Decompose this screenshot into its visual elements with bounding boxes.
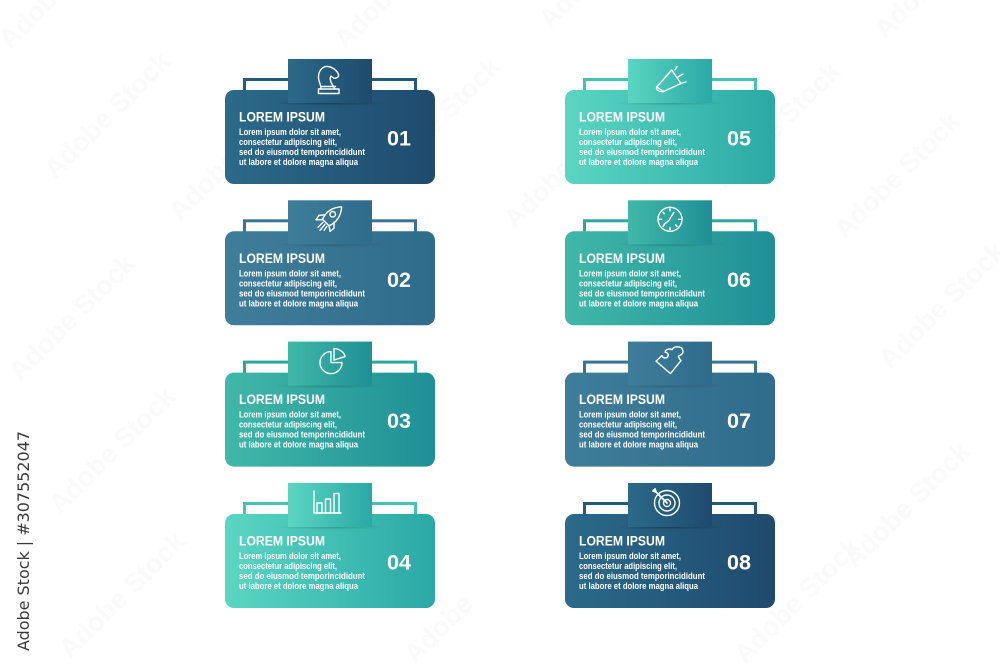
body text: consectetur adipiscing elit, [239,137,337,147]
card 05 [565,59,775,184]
card body [225,90,435,184]
card body [565,514,775,608]
card 08 [565,483,775,608]
watermark pattern: Adobe Stock [368,51,507,189]
frame [584,221,756,241]
body text: sed do eiusmod temporincididunt [239,430,365,440]
tab shadow [274,524,386,530]
heading: LOREM IPSUM [239,534,325,548]
card 07 [565,342,775,467]
body text: consectetur adipiscing elit, [239,278,337,288]
card 02 [225,200,435,325]
body text: Lorem ipsum dolor sit amet, [239,551,341,561]
body text: Lorem ipsum dolor sit amet, [579,127,681,137]
watermark pattern: Adobe [163,146,244,226]
frame [244,362,416,382]
body text: ut labore et dolore magna aliqua [579,298,699,308]
tab [628,342,712,386]
body text: Lorem ipsum dolor sit amet, [239,127,341,137]
heading: LOREM IPSUM [579,534,665,548]
watermark pattern: Adobe [498,154,579,234]
body text: sed do eiusmod temporincididunt [239,288,365,298]
body text: Lorem ipsum dolor sit amet, [239,410,341,420]
body text: consectetur adipiscing elit, [239,420,337,430]
icon: target with arrow [653,489,680,516]
number: 05 [727,128,751,150]
tab shadow [614,241,726,247]
card body [565,231,775,325]
body text: Lorem ipsum dolor sit amet, [579,410,681,420]
card 01 [225,59,435,184]
frame [244,80,416,100]
tab shadow [274,383,386,389]
icon: puzzle piece [656,347,683,374]
body text: ut labore et dolore magna aliqua [239,581,359,591]
tab shadow [614,524,726,530]
watermark pattern: Adobe Stock [828,106,967,244]
tab shadow [614,100,726,106]
watermark pattern: Adobe [398,589,479,667]
body text: Lorem ipsum dolor sit amet, [579,551,681,561]
watermark pattern: Adobe Stock [838,436,977,574]
icon: bar chart [314,491,341,513]
tab [288,200,372,244]
body text: sed do eiusmod temporincididunt [579,288,705,298]
tab shadow [274,100,386,106]
body text: ut labore et dolore magna aliqua [239,440,359,450]
body text: ut labore et dolore magna aliqua [239,157,359,167]
icon: chess knight [318,66,339,94]
tab [628,200,712,244]
icon: megaphone [657,66,686,92]
heading: LOREM IPSUM [579,392,665,407]
frame [244,504,416,524]
body text: sed do eiusmod temporincididunt [239,147,365,157]
card 03 [225,342,435,467]
number: 08 [727,552,751,574]
heading: LOREM IPSUM [239,392,325,407]
watermark pattern: Adobe Stock [53,526,192,664]
tab [288,483,372,527]
body text: ut labore et dolore magna aliqua [579,157,699,167]
watermark pattern: Adobe Stock [43,381,182,519]
card body [225,231,435,325]
watermark pattern: Adobe Stock [728,531,867,667]
heading: LOREM IPSUM [239,251,325,266]
icon: clock [658,207,682,231]
card body [225,514,435,608]
body text: ut labore et dolore magna aliqua [239,298,359,308]
number: 01 [387,128,411,150]
body text: ut labore et dolore magna aliqua [579,581,699,591]
watermark pattern: Adobe Stock [38,46,177,184]
body text: sed do eiusmod temporincididunt [579,430,705,440]
card 06 [565,200,775,325]
tab [288,59,372,103]
card body [565,90,775,184]
number: 04 [387,552,411,574]
number: 06 [727,269,751,292]
body text: sed do eiusmod temporincididunt [579,571,705,581]
heading: LOREM IPSUM [239,110,325,124]
body text: ut labore et dolore magna aliqua [579,440,699,450]
body text: consectetur adipiscing elit, [239,561,337,571]
frame [244,221,416,241]
frame [584,504,756,524]
watermark pattern: Adobe Stock [708,56,847,194]
heading: LOREM IPSUM [579,110,665,124]
number: 03 [387,410,411,433]
tab [628,483,712,527]
icon: pie chart [320,349,345,374]
heading: LOREM IPSUM [579,251,665,266]
body text: sed do eiusmod temporincididunt [579,147,705,157]
card body [225,373,435,467]
body text: consectetur adipiscing elit, [579,420,677,430]
tab shadow [274,241,386,247]
card 04 [225,483,435,608]
body text: Lorem ipsum dolor sit amet, [239,268,341,278]
number: 07 [727,410,751,433]
card body [565,373,775,467]
tab [628,59,712,103]
icon: rocket [316,207,342,231]
body text: consectetur adipiscing elit, [579,278,677,288]
body text: Lorem ipsum dolor sit amet, [579,268,681,278]
tab shadow [614,383,726,389]
stock id caption: Adobe Stock | #307552047 [14,431,33,651]
body text: consectetur adipiscing elit, [579,561,677,571]
watermark pattern: Adobe Stock [3,248,142,386]
body text: consectetur adipiscing elit, [579,137,677,147]
tab [288,342,372,386]
frame [584,362,756,382]
number: 02 [387,269,411,292]
frame [584,80,756,100]
body text: sed do eiusmod temporincididunt [239,571,365,581]
